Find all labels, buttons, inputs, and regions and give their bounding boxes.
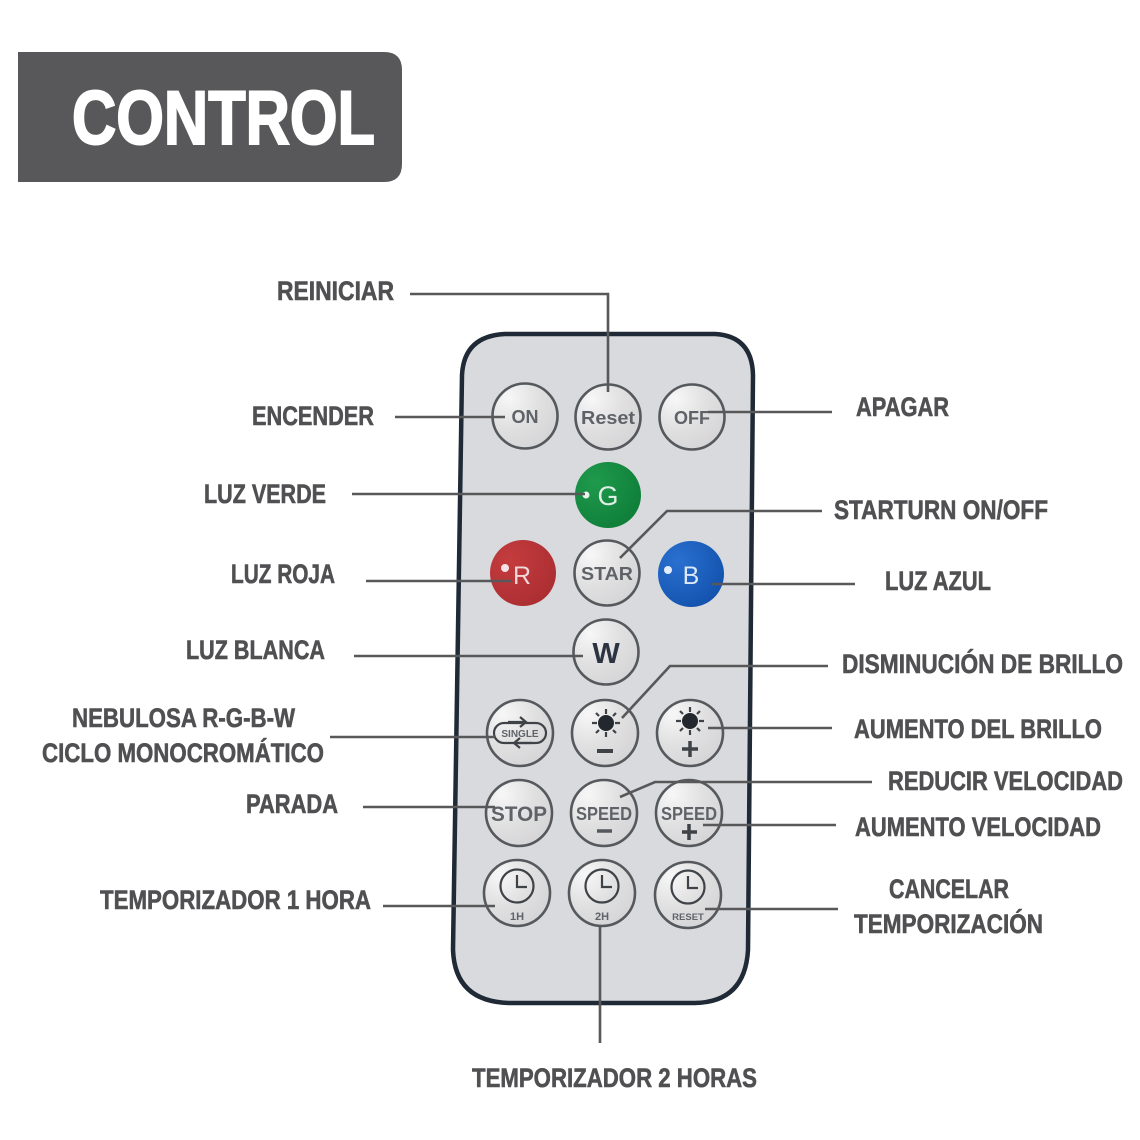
button: timer 2h: 2H xyxy=(595,911,609,923)
label: temporizador 1 hora: TEMPORIZADOR 1 HORA xyxy=(100,885,371,915)
button: speed up: SPEED xyxy=(661,804,717,824)
button: stop xyxy=(486,780,552,846)
label: luz azul: LUZ AZUL xyxy=(885,566,991,596)
label: starturn: STARTURN ON/OFF xyxy=(834,495,1048,525)
button: timer 2h xyxy=(569,860,635,926)
button: blue xyxy=(658,541,724,607)
button: stop: STOP xyxy=(491,803,547,826)
button: timer reset xyxy=(655,862,721,928)
label: nebulosa: NEBULOSA R-G-B-W xyxy=(72,703,295,733)
label: luz blanca: LUZ BLANCA xyxy=(186,635,325,665)
button: star xyxy=(574,540,640,606)
label: luz verde: LUZ VERDE xyxy=(204,479,326,509)
label: reiniciar: REINICIAR xyxy=(277,276,394,306)
button: white xyxy=(574,620,638,684)
callout lines xyxy=(330,294,872,1043)
button: single cycle xyxy=(487,700,553,766)
button: off xyxy=(660,384,724,450)
remote body xyxy=(453,334,753,1003)
button: speed up xyxy=(656,780,722,846)
button: red: R xyxy=(513,562,531,590)
button: reset xyxy=(576,384,640,450)
label: nebulosa xyxy=(42,703,324,768)
button: on: ON xyxy=(512,407,538,427)
button: red xyxy=(490,540,556,606)
remote control xyxy=(453,334,753,1003)
label: luz roja: LUZ ROJA xyxy=(231,559,335,589)
button: timer reset: RESET xyxy=(672,912,704,923)
button: green: G xyxy=(597,481,619,511)
label: encender: ENCENDER xyxy=(252,401,374,431)
label: nebulosa: CICLO MONOCROMÁTICO xyxy=(42,737,324,768)
title banner: CONTROL xyxy=(72,76,375,161)
button: single cycle: SINGLE xyxy=(501,729,539,740)
button: star: STAR xyxy=(581,564,633,584)
label: parada: PARADA xyxy=(246,789,338,819)
button: green xyxy=(575,462,641,528)
label: cancelar temporizacion: CANCELAR xyxy=(889,874,1009,904)
button: brightness up xyxy=(657,700,723,766)
label: temporizador 2 horas: TEMPORIZADOR 2 HORAS xyxy=(472,1063,757,1093)
button: timer 1h: 1H xyxy=(510,911,524,923)
button: off: OFF xyxy=(674,408,710,428)
button: reset: Reset xyxy=(581,408,635,428)
button: speed down xyxy=(571,780,637,846)
label: cancelar temporizacion: TEMPORIZACIÓN xyxy=(854,908,1043,939)
title banner xyxy=(18,52,402,182)
button: timer 1h xyxy=(484,860,550,926)
label: apagar: APAGAR xyxy=(856,392,949,422)
label: cancelar temporizacion xyxy=(854,874,1043,939)
button: white: W xyxy=(592,638,620,670)
button: brightness down xyxy=(572,700,638,766)
button: blue: B xyxy=(683,562,699,590)
button: speed down: SPEED xyxy=(576,804,632,824)
button: on xyxy=(492,384,558,448)
